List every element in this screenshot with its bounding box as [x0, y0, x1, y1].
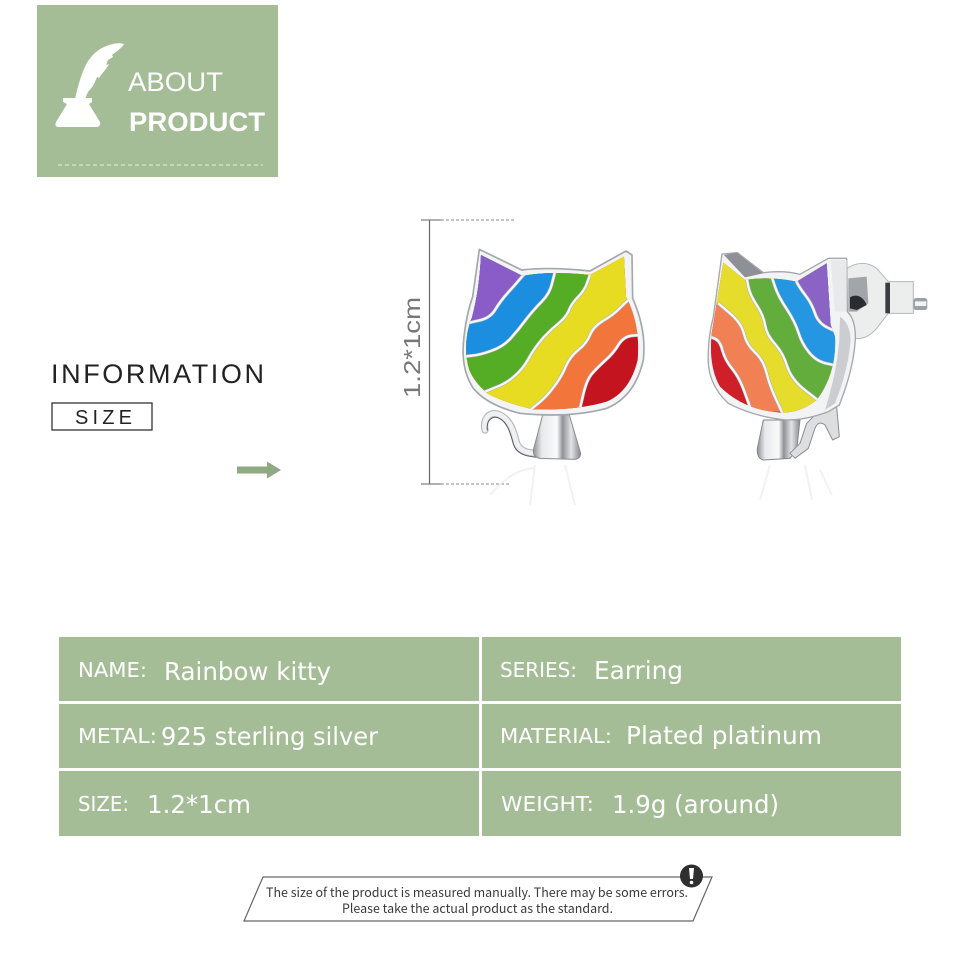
label: size tag: SIZE — [75, 407, 132, 429]
cell: weight — [482, 771, 901, 836]
note text line 1: The size of the product is measured manually. There may be some errors. — [266, 882, 688, 901]
dimension label: 1.2*1cm — [399, 297, 425, 398]
silver outline — [463, 249, 644, 415]
cell: metal: 925 sterling silver — [161, 722, 379, 751]
heading: information: INFORMATION — [51, 359, 264, 389]
note text line 2: Please take the actual product as the standard. — [342, 898, 613, 917]
enamel: yellow — [466, 255, 628, 409]
enamel: purple — [797, 264, 832, 329]
cell: size — [59, 771, 479, 836]
label: size tag — [52, 403, 152, 430]
cell: size: 1.2*1cm — [147, 790, 251, 819]
enamel: green — [466, 255, 590, 392]
cell: metal: METAL: — [78, 724, 157, 748]
tail — [485, 414, 538, 457]
panel: specification table — [59, 637, 901, 836]
cell: size: SIZE: — [78, 792, 129, 816]
cell: weight: 1.9g (around) — [612, 790, 779, 819]
enamel bands — [710, 262, 836, 413]
cell: material — [482, 704, 901, 768]
icon: feather quill and ink bottle — [55, 43, 124, 127]
cell: series — [482, 637, 901, 701]
heading: about: ABOUT — [128, 67, 223, 97]
enamel: blue — [466, 255, 554, 356]
callout: measurement note — [244, 864, 712, 921]
enamel: green — [747, 264, 836, 400]
cell: material: Plated platinum — [626, 721, 822, 750]
cell: name — [59, 637, 479, 701]
cell: name: Rainbow kitty — [164, 657, 331, 686]
icon: exclamation mark — [680, 864, 703, 888]
cell: series: SERIES: — [500, 658, 577, 682]
right earring: rainbow cat angled with post — [700, 240, 927, 460]
reflection under earrings — [490, 465, 832, 505]
enamel: orange — [711, 262, 836, 412]
enamel: blue — [774, 263, 836, 365]
legs and tail — [757, 407, 839, 460]
enamel: orange — [466, 255, 638, 410]
earring clutch — [847, 263, 927, 339]
enamel: red — [466, 255, 638, 410]
enamel: red — [710, 262, 836, 413]
silver separators — [463, 272, 640, 410]
enamel: purple — [470, 255, 522, 322]
panel: about product header — [37, 5, 278, 177]
heading: product: PRODUCT — [129, 107, 266, 137]
cell: weight: WEIGHT: — [501, 792, 594, 816]
silver separators — [707, 277, 838, 415]
left earring: rainbow cat front — [462, 248, 645, 460]
cell: name: NAME: — [78, 658, 147, 682]
cell: material: MATERIAL: — [500, 724, 612, 748]
cell: metal — [59, 704, 479, 768]
legs — [533, 415, 581, 459]
cell: series: Earring — [594, 656, 683, 685]
arrow: pointing to product — [237, 462, 281, 478]
silver body and side edge — [708, 253, 855, 420]
enamel: yellow — [716, 262, 836, 413]
enamel bands — [466, 255, 638, 410]
